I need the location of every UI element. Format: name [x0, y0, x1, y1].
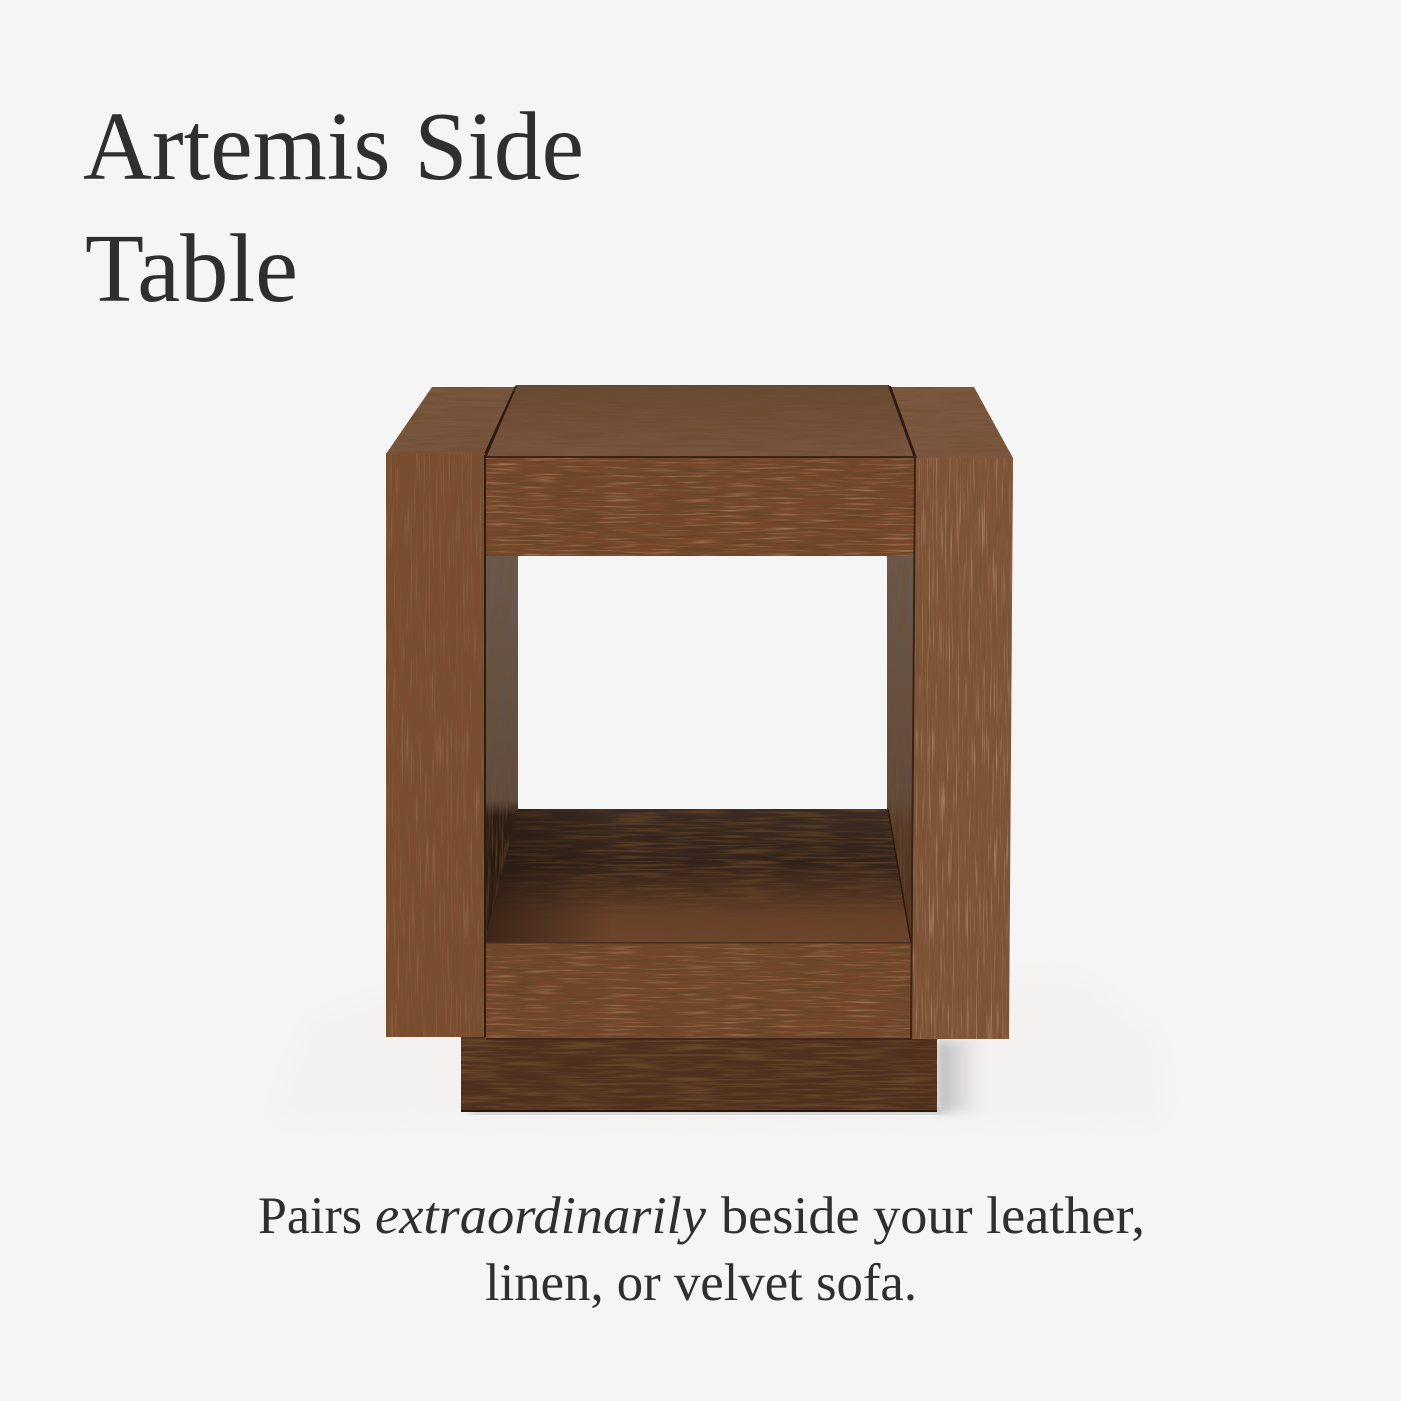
contact shadow [470, 1040, 987, 1114]
floor shadow [270, 975, 1165, 1122]
lower shelf surface [484, 809, 912, 944]
title: Artemis Side [83, 93, 584, 200]
product image: side table [386, 385, 1013, 1112]
upper front rail [484, 456, 916, 556]
right post [910, 458, 1013, 1039]
lower front rail [485, 942, 913, 1040]
top surface [484, 385, 916, 458]
top right block surface [888, 386, 1013, 458]
inner left side [484, 555, 518, 950]
caption [258, 1187, 1145, 1312]
caption: linen, or velvet sofa. [485, 1254, 917, 1312]
inner right side [887, 556, 914, 938]
title: Table [85, 215, 298, 322]
title [83, 93, 584, 322]
caption: beside your leather, [721, 1187, 1145, 1245]
caption: Pairs [258, 1187, 362, 1245]
caption: extraordinarily [375, 1187, 706, 1245]
plinth base [461, 1036, 937, 1112]
top left block surface [386, 386, 517, 458]
left post [386, 453, 486, 1037]
